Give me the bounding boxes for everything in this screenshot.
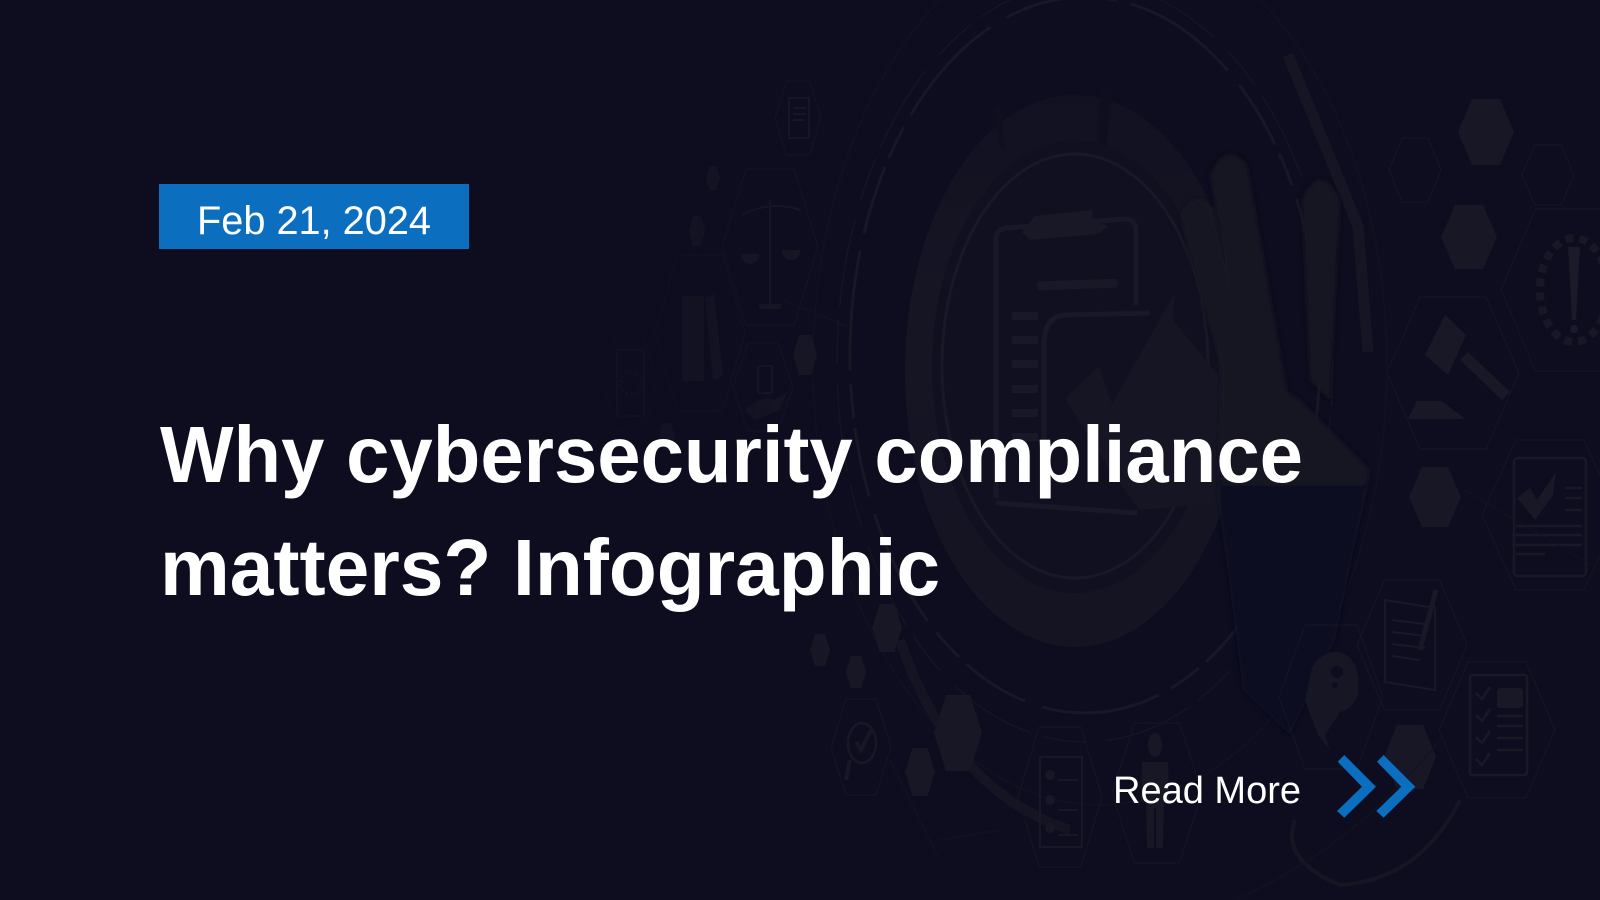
concentric rings <box>848 0 1345 714</box>
icon: scales <box>794 208 800 259</box>
title <box>160 410 1303 612</box>
icon: badge clipboard <box>617 350 644 416</box>
stethoscope cable <box>1292 800 1460 885</box>
hand <box>1212 156 1368 718</box>
icon: gavel <box>1408 315 1510 419</box>
icon: gear with exclamation <box>1540 238 1600 342</box>
background artwork: compliance illustration <box>794 0 1600 848</box>
icon: double chevron arrow <box>1337 755 1415 818</box>
icon: hand holding check <box>745 366 787 420</box>
icon: clipboard with pen <box>1385 590 1436 690</box>
title: matters? Infographic <box>160 523 940 612</box>
icon: books <box>682 294 723 381</box>
date badge <box>159 184 469 249</box>
icon: document <box>794 97 810 139</box>
connector lines <box>783 300 1600 900</box>
icon: clipboard with check <box>1514 458 1586 576</box>
filled small hexagons <box>794 99 1514 796</box>
icon: magnifier with check <box>846 723 876 780</box>
title: Why cybersecurity compliance <box>160 410 1303 499</box>
read more link: Read More <box>1113 770 1301 812</box>
date badge: Feb 21, 2024 <box>197 199 431 243</box>
icon: document list <box>1040 757 1082 847</box>
icon: head with question mark <box>1305 652 1359 750</box>
clipboard with checkmark <box>996 210 1255 513</box>
icon: checklist <box>1470 675 1527 775</box>
icon: person <box>1141 733 1169 848</box>
outline hexagons <box>1023 624 1344 815</box>
